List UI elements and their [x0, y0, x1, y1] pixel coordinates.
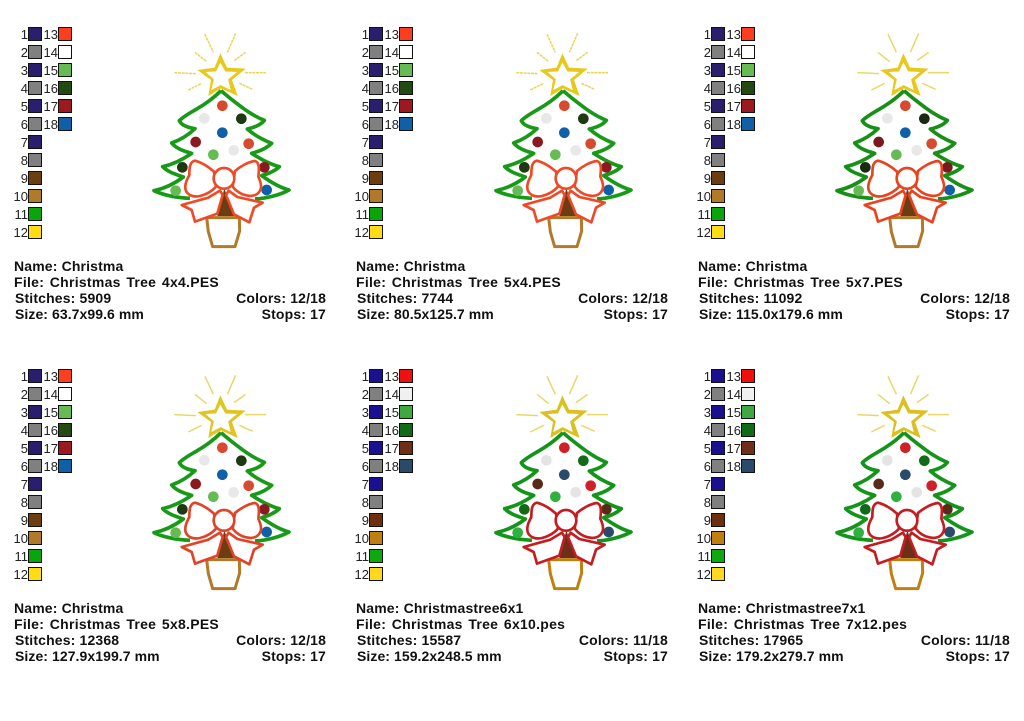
- legend: thread colours: 2: [21, 45, 28, 60]
- legend: thread colours: 16: [727, 423, 741, 438]
- stitches: Stitches: 7744: [357, 290, 453, 306]
- legend: thread colours: 4: [362, 423, 369, 438]
- file: File: Christmas Tree 5x7.PES: [698, 274, 903, 290]
- legend: thread colours: [697, 369, 755, 582]
- panel: Christmas Tree 4x4: [14, 27, 326, 322]
- size: Size: 80.5x125.7 mm: [357, 306, 494, 322]
- trunk: [559, 188, 576, 216]
- legend: thread colours: 18: [44, 459, 58, 474]
- legend: thread colours: 15: [44, 405, 58, 420]
- legend: thread colours: 14: [727, 45, 741, 60]
- legend: thread colours: 8: [704, 153, 711, 168]
- tree outline: [496, 433, 631, 541]
- legend: thread colours: 1: [362, 27, 369, 42]
- star rays: [516, 33, 608, 90]
- legend: thread colours: 18: [385, 117, 399, 132]
- legend: thread colours: 17: [385, 99, 399, 114]
- legend: thread colours: 4: [704, 423, 711, 438]
- legend: thread colours: 3: [362, 405, 369, 420]
- ornaments: [512, 442, 614, 538]
- legend: thread colours: 6: [21, 117, 28, 132]
- legend: thread colours: 11: [698, 207, 711, 222]
- stitches: Stitches: 5909: [15, 290, 111, 306]
- legend: thread colours: 12: [697, 567, 711, 582]
- legend: thread colours: 1: [21, 369, 28, 384]
- legend: thread colours: 7: [362, 477, 369, 492]
- name: Name: Christmastree7x1: [698, 600, 866, 616]
- star: [880, 395, 929, 438]
- bow: [865, 503, 946, 564]
- name: Name: Christma: [356, 258, 465, 274]
- legend: thread colours: 14: [385, 45, 399, 60]
- legend: thread colours: 16: [44, 423, 58, 438]
- icon: embroidered Christmas tree: [835, 375, 974, 590]
- legend: thread colours: 17: [385, 441, 399, 456]
- legend: thread colours: 2: [362, 45, 369, 60]
- star rays: [857, 375, 949, 432]
- panel: Christmas Tree 7x12: [697, 369, 1010, 664]
- stitches: Stitches: 11092: [699, 290, 802, 306]
- legend: thread colours: 11: [698, 549, 711, 564]
- pot: [207, 560, 240, 589]
- pot: [890, 218, 923, 247]
- size: Size: 179.2x279.7 mm: [699, 648, 844, 664]
- legend: thread colours: 9: [362, 513, 369, 528]
- bow: [182, 161, 263, 222]
- stops: Stops: 17: [262, 306, 326, 322]
- legend: thread colours: 2: [704, 45, 711, 60]
- legend: thread colours: 3: [21, 63, 28, 78]
- icon: embroidered Christmas tree: [152, 33, 291, 248]
- legend: thread colours: 14: [44, 45, 58, 60]
- stitches: Stitches: 17965: [699, 632, 803, 648]
- legend: thread colours: 9: [362, 171, 369, 186]
- legend: thread colours: 12: [355, 567, 369, 582]
- icon: embroidered Christmas tree: [152, 375, 291, 590]
- colors: Colors: 12/18: [236, 290, 326, 306]
- legend: thread colours: 16: [385, 423, 399, 438]
- legend: thread colours: 4: [362, 81, 369, 96]
- legend: thread colours: 10: [697, 531, 711, 546]
- name: Name: Christma: [14, 258, 123, 274]
- size: Size: 127.9x199.7 mm: [15, 648, 160, 664]
- legend: thread colours: 9: [704, 513, 711, 528]
- bow: [524, 161, 605, 222]
- panel: Christmas Tree 5x4: [355, 27, 668, 322]
- legend: thread colours: 1: [362, 369, 369, 384]
- legend: thread colours: 8: [362, 495, 369, 510]
- ornaments: [853, 100, 955, 196]
- star: [880, 53, 929, 96]
- legend: thread colours: 9: [704, 171, 711, 186]
- legend: thread colours: 7: [21, 477, 28, 492]
- legend: thread colours: 11: [356, 549, 369, 564]
- legend: thread colours: 13: [385, 27, 399, 42]
- panel: Christmas Tree 5x7: [697, 27, 1010, 322]
- legend: thread colours: 10: [14, 531, 28, 546]
- star: [197, 395, 246, 438]
- legend: thread colours: 13: [727, 369, 741, 384]
- legend: thread colours: 3: [21, 405, 28, 420]
- legend: thread colours: [355, 369, 413, 582]
- stops: Stops: 17: [946, 306, 1010, 322]
- tree outline: [837, 433, 972, 541]
- legend: thread colours: 18: [727, 459, 741, 474]
- legend: thread colours: 8: [362, 153, 369, 168]
- legend: thread colours: 1: [704, 369, 711, 384]
- panel: Christmas Tree 5x8: [14, 369, 326, 664]
- tree outline: [496, 91, 631, 199]
- legend: thread colours: 13: [44, 27, 58, 42]
- ornaments: [512, 100, 614, 196]
- legend: thread colours: 11: [14, 549, 28, 564]
- trunk: [217, 188, 234, 216]
- legend: thread colours: 14: [44, 387, 58, 402]
- legend: thread colours: 18: [44, 117, 58, 132]
- legend: thread colours: 10: [697, 189, 711, 204]
- colors: Colors: 11/18: [921, 632, 1010, 648]
- colors: Colors: 12/18: [920, 290, 1010, 306]
- legend: thread colours: 5: [362, 99, 369, 114]
- star rays: [174, 33, 266, 90]
- legend: thread colours: 6: [704, 459, 711, 474]
- name: Name: Christma: [698, 258, 807, 274]
- icon: embroidered Christmas tree: [494, 375, 633, 590]
- legend: thread colours: 13: [727, 27, 741, 42]
- legend: thread colours: 15: [727, 405, 741, 420]
- tree outline: [154, 91, 289, 199]
- file: File: Christmas Tree 5x8.PES: [14, 616, 219, 632]
- legend: thread colours: 14: [727, 387, 741, 402]
- legend: thread colours: 14: [385, 387, 399, 402]
- legend: thread colours: 6: [704, 117, 711, 132]
- legend: thread colours: 13: [44, 369, 58, 384]
- icon: embroidered Christmas tree: [835, 33, 974, 248]
- legend: thread colours: 10: [355, 531, 369, 546]
- trunk: [900, 188, 917, 216]
- icon: embroidered Christmas tree: [494, 33, 633, 248]
- legend: thread colours: 4: [704, 81, 711, 96]
- legend: thread colours: 17: [44, 441, 58, 456]
- legend: thread colours: 15: [727, 63, 741, 78]
- legend: thread colours: 7: [704, 477, 711, 492]
- legend: thread colours: 17: [44, 99, 58, 114]
- pot: [549, 560, 582, 589]
- name: Name: Christmastree6x1: [356, 600, 524, 616]
- legend: thread colours: 1: [21, 27, 28, 42]
- legend: thread colours: 9: [21, 171, 28, 186]
- legend: thread colours: 2: [362, 387, 369, 402]
- legend: thread colours: 17: [727, 99, 741, 114]
- pot: [549, 218, 582, 247]
- legend: thread colours: 18: [727, 117, 741, 132]
- pot: [207, 218, 240, 247]
- legend: thread colours: 12: [14, 567, 28, 582]
- colors: Colors: 11/18: [579, 632, 668, 648]
- legend: thread colours: 16: [385, 81, 399, 96]
- legend: thread colours: 12: [355, 225, 369, 240]
- legend: thread colours: 5: [362, 441, 369, 456]
- star: [197, 53, 246, 96]
- star rays: [516, 375, 608, 432]
- tree outline: [837, 91, 972, 199]
- legend: thread colours: 11: [356, 207, 369, 222]
- legend: thread colours: [14, 27, 72, 240]
- legend: thread colours: [355, 27, 413, 240]
- panel: Christmas Tree 6x10: [355, 369, 668, 664]
- legend: thread colours: 1: [704, 27, 711, 42]
- stops: Stops: 17: [262, 648, 326, 664]
- legend: thread colours: 7: [704, 135, 711, 150]
- legend: thread colours: [14, 369, 72, 582]
- star rays: [857, 33, 949, 90]
- legend: thread colours: 4: [21, 81, 28, 96]
- stops: Stops: 17: [604, 648, 668, 664]
- legend: thread colours: 7: [362, 135, 369, 150]
- legend: thread colours: 2: [704, 387, 711, 402]
- legend: thread colours: 9: [21, 513, 28, 528]
- stitches: Stitches: 12368: [15, 632, 119, 648]
- star: [539, 395, 588, 438]
- legend: thread colours: 11: [14, 207, 28, 222]
- ornaments: [170, 442, 272, 538]
- legend: thread colours: 5: [704, 99, 711, 114]
- stops: Stops: 17: [604, 306, 668, 322]
- ornaments: [170, 100, 272, 196]
- legend: thread colours: 12: [14, 225, 28, 240]
- star: [539, 53, 588, 96]
- trunk: [217, 530, 234, 558]
- legend: thread colours: 8: [704, 495, 711, 510]
- legend: thread colours: 3: [362, 63, 369, 78]
- legend: thread colours: 13: [385, 369, 399, 384]
- bow: [865, 161, 946, 222]
- legend: thread colours: 10: [355, 189, 369, 204]
- legend: thread colours: 12: [697, 225, 711, 240]
- stitches: Stitches: 15587: [357, 632, 461, 648]
- legend: thread colours: 6: [21, 459, 28, 474]
- trunk: [900, 530, 917, 558]
- stops: Stops: 17: [946, 648, 1010, 664]
- file: File: Christmas Tree 4x4.PES: [14, 274, 219, 290]
- legend: thread colours: 8: [21, 153, 28, 168]
- legend: thread colours: 10: [14, 189, 28, 204]
- colors: Colors: 12/18: [578, 290, 668, 306]
- legend: thread colours: 17: [727, 441, 741, 456]
- legend: thread colours: [697, 27, 755, 240]
- size: Size: 115.0x179.6 mm: [699, 306, 843, 322]
- pot: [890, 560, 923, 589]
- legend: thread colours: 4: [21, 423, 28, 438]
- legend: thread colours: 16: [727, 81, 741, 96]
- star rays: [174, 375, 266, 432]
- file: File: Christmas Tree 5x4.PES: [356, 274, 561, 290]
- ornaments: [853, 442, 955, 538]
- file: File: Christmas Tree 6x10.pes: [356, 616, 565, 632]
- file: File: Christmas Tree 7x12.pes: [698, 616, 907, 632]
- legend: thread colours: 18: [385, 459, 399, 474]
- legend: thread colours: 5: [21, 441, 28, 456]
- legend: thread colours: 3: [704, 405, 711, 420]
- legend: thread colours: 7: [21, 135, 28, 150]
- legend: thread colours: 3: [704, 63, 711, 78]
- bow: [182, 503, 263, 564]
- legend: thread colours: 5: [704, 441, 711, 456]
- trunk: [559, 530, 576, 558]
- name: Name: Christma: [14, 600, 123, 616]
- tree outline: [154, 433, 289, 541]
- legend: thread colours: 5: [21, 99, 28, 114]
- legend: thread colours: 16: [44, 81, 58, 96]
- legend: thread colours: 6: [362, 117, 369, 132]
- colors: Colors: 12/18: [236, 632, 326, 648]
- legend: thread colours: 8: [21, 495, 28, 510]
- legend: thread colours: 6: [362, 459, 369, 474]
- size: Size: 63.7x99.6 mm: [15, 306, 144, 322]
- legend: thread colours: 15: [385, 63, 399, 78]
- size: Size: 159.2x248.5 mm: [357, 648, 502, 664]
- legend: thread colours: 15: [44, 63, 58, 78]
- legend: thread colours: 15: [385, 405, 399, 420]
- legend: thread colours: 2: [21, 387, 28, 402]
- bow: [524, 503, 605, 564]
